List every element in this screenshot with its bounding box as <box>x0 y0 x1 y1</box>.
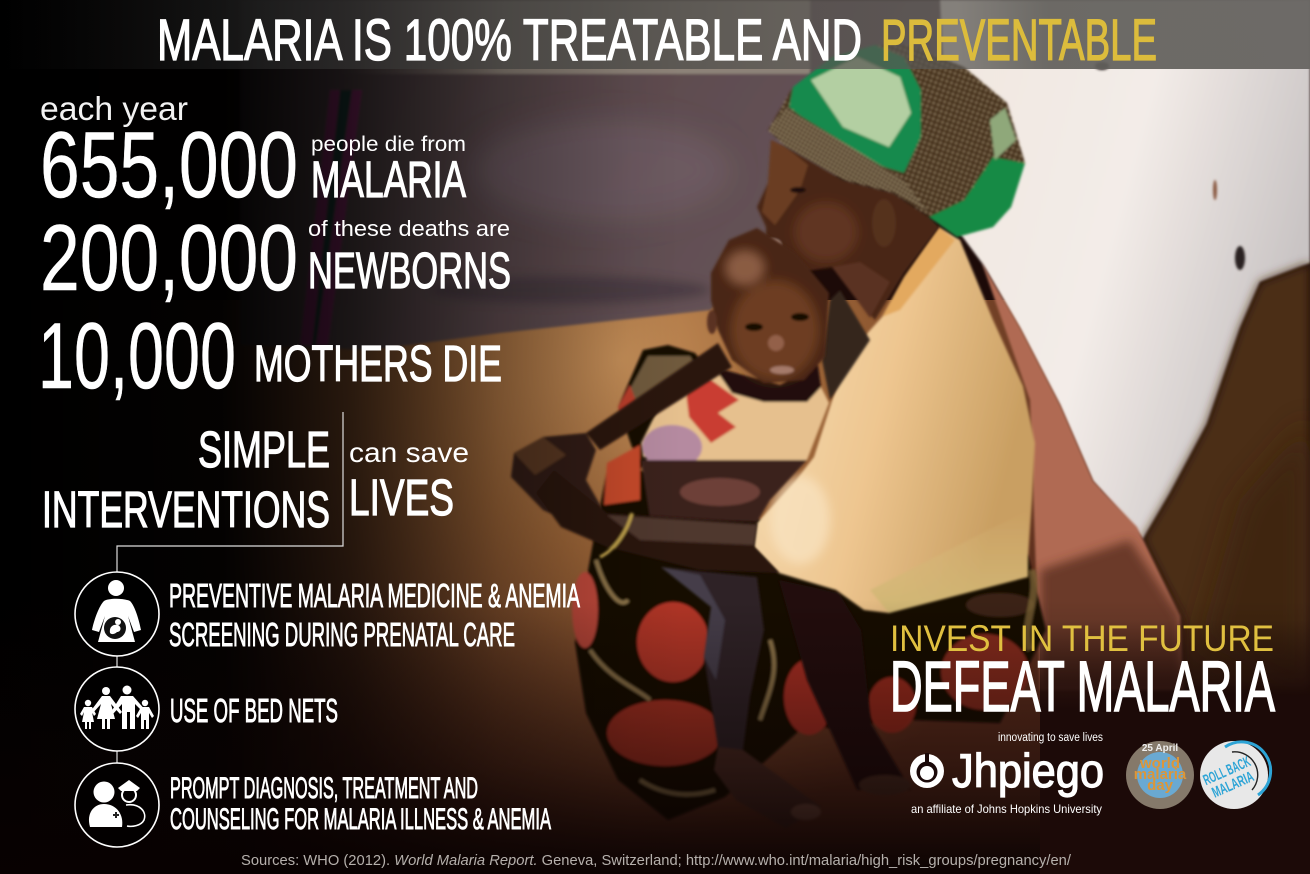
logo: Roll Back Malaria <box>1200 741 1271 809</box>
stat: 655,000: each year <box>40 90 188 127</box>
intervention list: PROMPT DIAGNOSIS, TREATMENT AND <box>170 772 478 805</box>
logo: Roll Back Malaria: MALARIA <box>1209 768 1257 802</box>
intervention list: USE OF BED NETS <box>170 692 338 729</box>
stat: 10,000 <box>38 303 502 408</box>
headscarf <box>768 45 1025 237</box>
title: PREVENTABLE <box>881 8 1157 73</box>
logo: World Malaria Day: 25 April <box>1142 743 1178 754</box>
heading: simple interventions can save lives <box>42 421 469 538</box>
skirt <box>572 345 1046 820</box>
heading: simple interventions can save lives: can save <box>349 437 469 468</box>
title: MALARIA IS 100% TREATABLE AND <box>157 8 862 73</box>
intervention list <box>169 577 580 836</box>
call to action: INVEST IN THE FUTURE <box>890 618 1274 659</box>
connector lines <box>117 412 343 763</box>
icon: family <box>75 667 159 751</box>
icon: doctor and nurse <box>75 763 159 847</box>
logo: Jhpiego: Jhpiego <box>952 744 1104 797</box>
title band <box>0 0 1310 69</box>
stat: 655,000 <box>40 90 466 217</box>
stat: 655,000: 655,000 <box>40 112 298 217</box>
woman's shirt <box>754 227 1035 613</box>
intervention list: PREVENTIVE MALARIA MEDICINE & ANEMIA <box>169 577 580 614</box>
child legs and feet <box>661 567 911 828</box>
icon: pregnant woman <box>75 572 159 656</box>
stat: 655,000: MALARIA <box>311 151 466 208</box>
logo: World Malaria Day <box>1126 741 1194 809</box>
heading: simple interventions can save lives: SIMPLE <box>198 421 330 478</box>
blanket <box>240 0 1000 350</box>
pink skirting band <box>982 263 1183 690</box>
logo: Jhpiego <box>910 732 1104 816</box>
logo: Jhpiego: innovating to save lives <box>998 732 1103 744</box>
logo: Jhpiego: an affiliate of Johns Hopkins University <box>911 802 1102 816</box>
heading: simple interventions can save lives: LIVES <box>349 469 454 526</box>
stat: 200,000: of these deaths are <box>308 216 510 241</box>
woman's head and neck <box>757 140 939 400</box>
heading: simple interventions can save lives: INTERVENTIONS <box>42 481 330 538</box>
child <box>641 228 829 522</box>
logo: World Malaria Day: day <box>1147 777 1174 794</box>
logo: World Malaria Day: world <box>1139 755 1180 772</box>
intervention list: COUNSELING FOR MALARIA ILLNESS & ANEMIA <box>170 803 551 836</box>
call to action <box>890 618 1275 727</box>
stat: 200,000: NEWBORNS <box>308 242 511 299</box>
sources: Sources: WHO (2012). World Malaria Report. Geneva, Switzerland; http://www.who.int/malaria/high_risk_groups/pregnancy/en/ <box>241 853 1072 869</box>
stat: 10,000: MOTHERS DIE <box>254 335 502 392</box>
logo: Roll Back Malaria: ROLL BACK <box>1201 753 1253 789</box>
wall shadow lower right <box>1143 263 1310 690</box>
stat: 655,000: people die from <box>311 133 466 156</box>
stat: 10,000: 10,000 <box>38 303 236 408</box>
floor <box>0 300 1100 874</box>
arms and hands <box>511 343 779 573</box>
stat: 200,000: 200,000 <box>40 205 298 310</box>
logo: World Malaria Day: malaria <box>1134 766 1187 783</box>
wall <box>940 0 1310 539</box>
wall marks <box>1095 62 1245 270</box>
intervention list: SCREENING DURING PRENATAL CARE <box>169 616 515 653</box>
